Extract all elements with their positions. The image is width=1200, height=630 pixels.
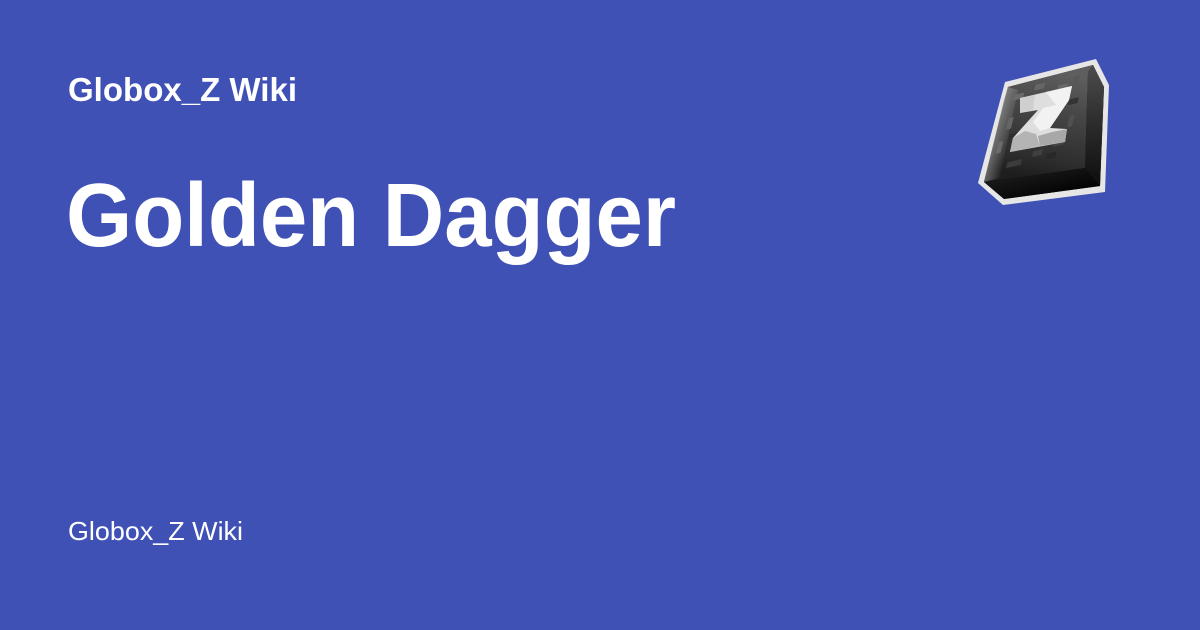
site name heading: Globox_Z Wiki — [68, 71, 297, 108]
footer site name: Globox_Z Wiki — [68, 516, 243, 546]
icon: Z logo block — [978, 59, 1109, 205]
title: Golden Dagger — [66, 166, 676, 266]
